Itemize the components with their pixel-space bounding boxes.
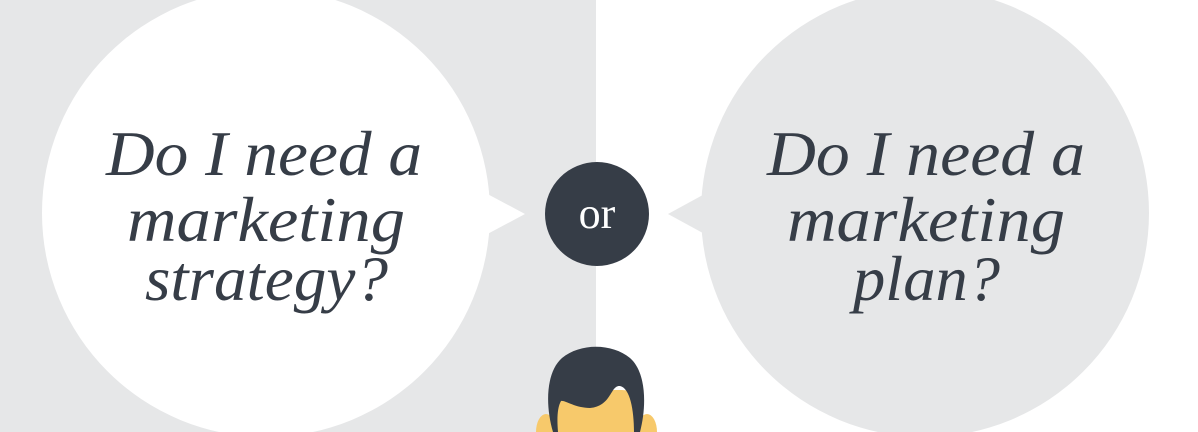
or badge xyxy=(545,162,649,266)
text: strategy question xyxy=(105,118,422,314)
text: plan question: plan? xyxy=(849,243,1000,314)
text: plan question: Do I need a xyxy=(766,118,1085,189)
icon: person head xyxy=(536,347,657,432)
text: strategy question: marketing xyxy=(127,184,405,255)
text: strategy question: strategy? xyxy=(145,243,388,314)
text: strategy question: Do I need a xyxy=(105,118,422,189)
text: plan question xyxy=(766,118,1085,314)
speech bubble: strategy xyxy=(42,0,525,432)
text: plan question: marketing xyxy=(787,184,1065,255)
or badge: or xyxy=(579,189,616,238)
speech bubble: plan xyxy=(668,0,1149,432)
